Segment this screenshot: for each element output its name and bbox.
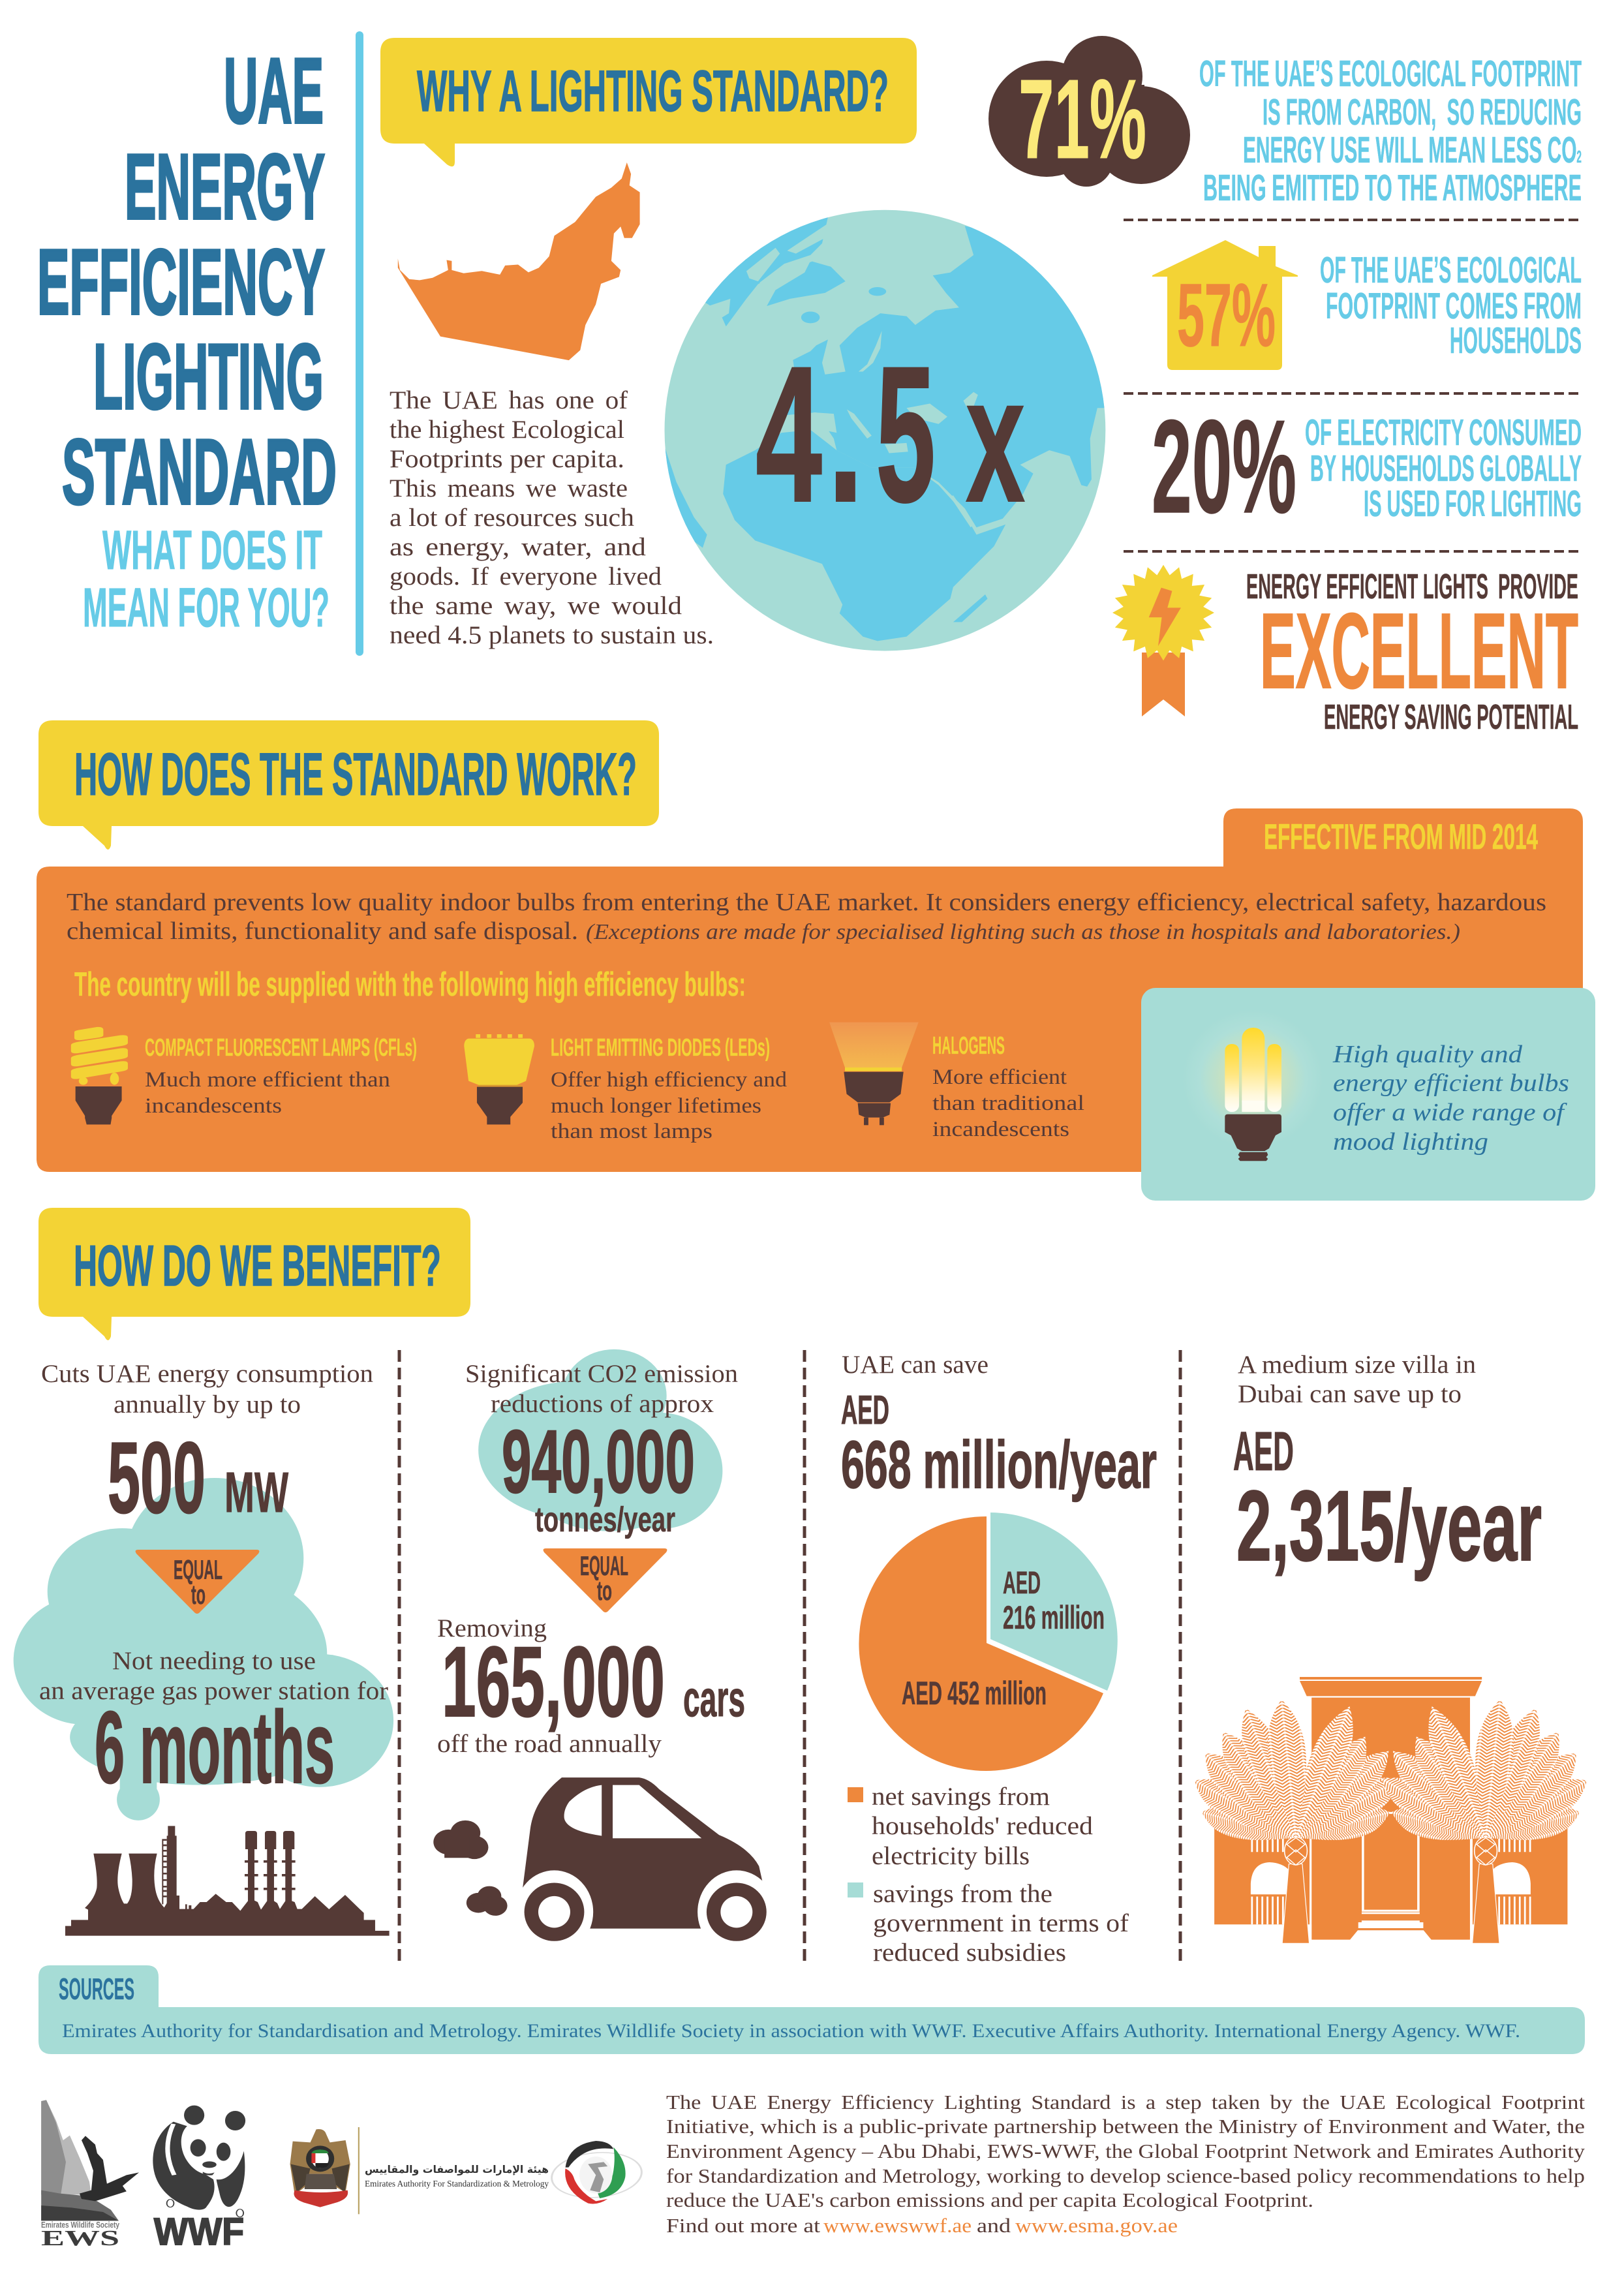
arrow: equal to: to (191, 1579, 206, 1610)
panel: standard explanation: incandescents (932, 1118, 1069, 1141)
logo: Emirates Wildlife Society: EWS (41, 2226, 119, 2251)
heading: how do we benefit (38, 1208, 470, 1340)
callout: 4.5 x: x (966, 339, 1026, 540)
arrow: equal to (544, 1548, 667, 1612)
arrow: equal to: EQUAL (580, 1550, 628, 1581)
legend: savings from the (873, 1880, 1052, 1908)
panel: mood lighting (1141, 988, 1595, 1201)
panel: CO2 benefit: tonnes/year (535, 1500, 675, 1539)
panel: national savings: UAE can save (842, 1351, 988, 1379)
text block: ecological footprint (390, 386, 714, 649)
panel: CO2 benefit: Significant CO2 emission (465, 1360, 738, 1388)
panel: mood lighting: energy efficient bulbs (1333, 1069, 1569, 1097)
logo: Emirates Wildlife Society: Emirates Wildlife Society (41, 2220, 120, 2230)
arrow: equal to: to (597, 1575, 612, 1606)
panel: sources: Emirates Authority for Standardisation and Metrology. Emirates Wildlife Society in association with WWF. Executive Affairs Authority. International Energy Agency. WWF. (62, 2020, 1520, 2042)
stat: 57 percent house: 57% (1177, 266, 1276, 365)
panel: mood lighting: mood lighting (1333, 1128, 1488, 1156)
callout: 4.5 x: 5 (876, 326, 936, 542)
icon: award badge (1112, 565, 1214, 716)
panel: CO2 benefit: reductions of approx (491, 1390, 714, 1418)
text block: ecological footprint: the highest Ecological (390, 416, 624, 444)
text block: about the initiative: www.esma.gov.ae (1015, 2214, 1178, 2237)
panel: standard explanation: (Exceptions are made for specialised lighting such as those in hospitals and laboratories.) (586, 920, 1460, 944)
text block: about the initiative: Find out more at (666, 2214, 820, 2237)
panel: national savings (841, 1351, 1157, 1967)
panel: energy benefit (14, 1360, 393, 1936)
logo: Emirates Wildlife Society (41, 2100, 139, 2251)
title: EFFICIENCY (37, 230, 325, 334)
legend: government in terms of (873, 1909, 1129, 1937)
logo: WWF panda (153, 2106, 245, 2253)
text block: ecological footprint: need 4.5 planets to sustain us. (390, 621, 714, 649)
panel: energy benefit: an average gas power station for (39, 1677, 388, 1705)
stat: 20 percent (1152, 393, 1582, 541)
panel: standard explanation (37, 808, 1583, 1172)
text block: ecological footprint: the same way, we would (390, 592, 682, 620)
text block: ecological footprint: This means we waste (390, 474, 628, 502)
teal cloud (478, 1349, 722, 1531)
legend: reduced subsidies (873, 1939, 1066, 1967)
subtitle: WHAT DOES IT (102, 519, 322, 581)
heading: how does the standard work (38, 720, 659, 850)
callout: excellent energy saving (1246, 567, 1578, 737)
teal cloud (14, 1478, 393, 1820)
panel: mood lighting: offer a wide range of (1333, 1099, 1567, 1126)
panel: national savings: 668 million/year (841, 1427, 1157, 1502)
panel: national savings: AED (841, 1388, 889, 1433)
icon: power plant (65, 1826, 390, 1936)
icon: car with exhaust (433, 1777, 776, 1954)
arrow: equal to: EQUAL (174, 1554, 222, 1585)
panel: energy benefit: 6 months (95, 1691, 335, 1805)
panel: CO2 benefit: 940,000 (502, 1412, 695, 1512)
legend: net savings from (872, 1783, 1050, 1811)
panel: CO2 benefit: cars (683, 1670, 745, 1727)
panel: energy benefit: 500 (108, 1421, 206, 1534)
callout: 4.5 x: . (827, 326, 864, 542)
legend (848, 1783, 1129, 1967)
panel: villa savings: AED (1233, 1421, 1294, 1482)
icon: CFL bulb (71, 1027, 128, 1124)
stat: 71 percent cloud: 71% (1019, 55, 1146, 182)
panel: standard explanation: much longer lifetimes (551, 1094, 761, 1118)
panel: standard explanation: incandescents (145, 1094, 282, 1118)
logo: UAE emblem and ESMA: Emirates Authority For Standardization & Metrology (365, 2179, 549, 2189)
subtitle: MEAN FOR YOU? (83, 577, 329, 638)
panel: sources (38, 1965, 1585, 2054)
panel: sources: SOURCES (59, 1972, 134, 2006)
panel: standard explanation: than traditional (932, 1092, 1084, 1115)
subtitle (83, 519, 329, 638)
panel: standard explanation: LIGHT EMITTING DIODES (LEDs) (551, 1034, 770, 1062)
pie chart (859, 1513, 1118, 1771)
text block: about the initiative: www.ewswwf.ae (823, 2214, 972, 2237)
legend: households' reduced (872, 1812, 1094, 1840)
panel: standard explanation: The country will be supplied with the following high efficiency bulbs: (74, 966, 746, 1004)
text block: about the initiative: Initiative, which is a public-private partnership between the Ministry of Environment and Water, the (666, 2115, 1585, 2138)
panel: energy benefit: Not needing to use (112, 1647, 316, 1675)
panel: standard explanation: The standard prevents low quality indoor bulbs from entering the UAE market. It considers energy efficiency, electrical safety, hazardous (67, 889, 1546, 916)
pie chart: AED 452 million (902, 1675, 1047, 1712)
logo: WWF panda: WWF (154, 2211, 244, 2253)
globe (653, 210, 1125, 651)
title: ENERGY (125, 135, 325, 239)
panel: villa savings: Dubai can save up to (1238, 1380, 1462, 1408)
panel: villa savings: A medium size villa in (1238, 1351, 1476, 1379)
heading: how do we benefit: HOW DO WE BENEFIT? (74, 1233, 441, 1298)
panel: CO2 benefit: 165,000 (442, 1626, 665, 1738)
panel: energy benefit: MW (224, 1461, 289, 1524)
title: STANDARD (62, 420, 337, 524)
legend: electricity bills (872, 1842, 1030, 1870)
pie chart: 216 million (1003, 1599, 1105, 1636)
icon: halogen bulb (829, 1022, 919, 1125)
text block: about the initiative: for Standardization and Metrology, working to develop science-based policy recommendations to help (666, 2164, 1585, 2187)
panel: CO2 benefit: Removing (437, 1614, 547, 1642)
panel: CO2 benefit: off the road annually (437, 1730, 662, 1758)
heading: how does the standard work: HOW DOES THE STANDARD WORK? (74, 741, 637, 808)
text block: about the initiative: The UAE Energy Efficiency Lighting Standard is a step taken by the UAE Ecological Footprint (666, 2091, 1585, 2113)
callout: 4.5 x (756, 326, 1026, 542)
icon: glowing bulb (1182, 1009, 1323, 1161)
panel: standard explanation: COMPACT FLUORESCENT LAMPS (CFLs) (145, 1034, 417, 1062)
panel: standard explanation: chemical limits, functionality and safe disposal. (67, 917, 578, 945)
panel: energy benefit: annually by up to (114, 1390, 301, 1419)
arrow: equal to (136, 1550, 259, 1614)
panel: mood lighting: High quality and (1332, 1041, 1523, 1068)
text block: about the initiative: reduce the UAE's carbon emissions and per capita Ecological Footprint. (666, 2189, 1313, 2211)
icon: villa with palms (1184, 1677, 1598, 1943)
title: UAE (224, 39, 324, 143)
panel: standard explanation: Much more efficient than (145, 1068, 390, 1092)
panel: villa savings (1184, 1351, 1598, 1943)
text block: ecological footprint: Footprints per capita. (390, 445, 624, 473)
panel: standard explanation: More efficient (932, 1066, 1067, 1089)
text block: ecological footprint: as energy, water, and (390, 533, 647, 561)
logo: Ecological Footprint Initiative (538, 2141, 655, 2205)
panel: CO2 benefit (433, 1349, 776, 1954)
panel: standard explanation: HALOGENS (932, 1032, 1005, 1060)
stat: 57 percent house (1152, 240, 1582, 370)
pie chart: AED (1003, 1566, 1041, 1601)
icon: UAE map (398, 162, 640, 360)
stat: 71 percent cloud (988, 36, 1582, 209)
panel: standard explanation: than most lamps (551, 1120, 712, 1143)
text block: ecological footprint: The UAE has one of (390, 386, 628, 414)
text block: about the initiative: and (977, 2214, 1011, 2237)
stat: 20 percent: 20% (1152, 393, 1296, 541)
icon: LED bulb (464, 1034, 534, 1124)
heading: why a lighting standard: WHY A LIGHTING STANDARD? (417, 58, 889, 123)
text block: ecological footprint: a lot of resources such (390, 504, 634, 532)
text block: about the initiative (666, 2091, 1586, 2237)
panel: standard explanation: Offer high efficiency and (551, 1068, 788, 1092)
heading: why a lighting standard (380, 38, 917, 166)
logo: UAE emblem and ESMA (290, 2127, 549, 2214)
panel: energy benefit: Cuts UAE energy consumption (41, 1360, 373, 1388)
logo: UAE emblem and ESMA: هيئة الإمارات للمواصفات والمقاييس (365, 2163, 549, 2175)
text block: ecological footprint: goods. If everyone lived (390, 562, 662, 591)
text block: about the initiative: Environment Agency – Abu Dhabi, EWS-WWF, the Global Footprint Network and Emirates Authority (666, 2140, 1586, 2162)
callout: 4.5 x: 4 (756, 326, 823, 542)
title: LIGHTING (93, 325, 324, 429)
title (37, 39, 337, 524)
